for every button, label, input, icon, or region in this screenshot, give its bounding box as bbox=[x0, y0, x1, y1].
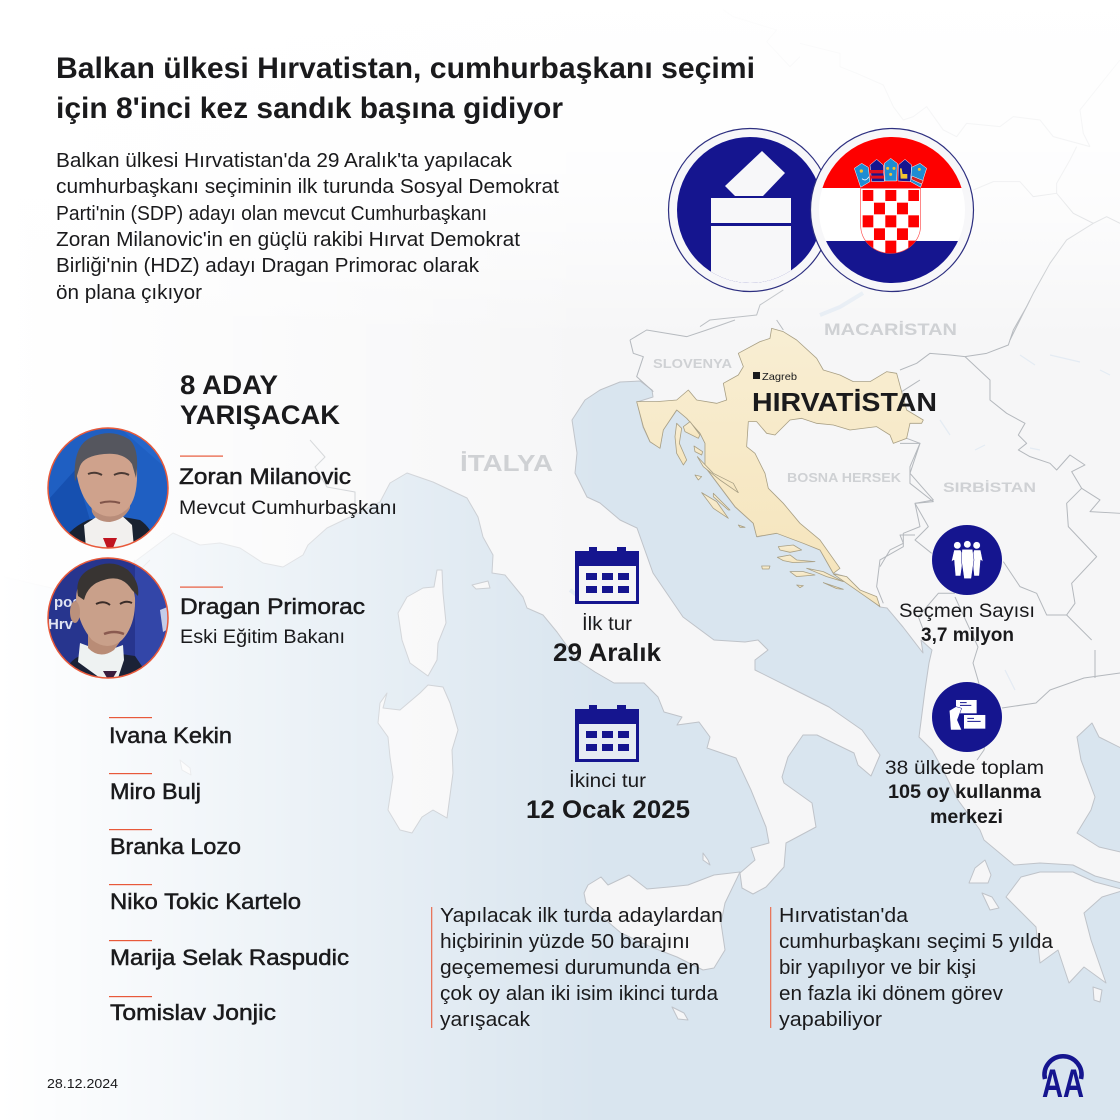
intro text bbox=[56, 150, 559, 304]
country label: Hırvatistan: HIRVATİSTAN bbox=[752, 389, 937, 417]
soft white fades bbox=[0, 0, 600, 1120]
intro text: Parti'nin (SDP) adayı olan mevcut Cumhurbaşkanı bbox=[56, 203, 487, 225]
candidate: Dragan Primorac bbox=[180, 586, 365, 648]
text block: second round rule: geçememesi durumunda en bbox=[440, 957, 700, 979]
icon: calendar first round bbox=[575, 547, 639, 604]
country label: Sırbistan: SIRBİSTAN bbox=[943, 479, 1036, 495]
intro text: cumhurbaşkanı seçiminin ilk turunda Sosyal Demokrat bbox=[56, 176, 559, 198]
intro text: ön plana çıkıyor bbox=[56, 282, 202, 304]
candidate: Branka Lozo: Branka Lozo bbox=[110, 834, 241, 859]
candidate: Marija Selak Raspudic: Marija Selak Raspudic bbox=[110, 945, 349, 970]
icon: ballot box bbox=[668, 128, 832, 292]
candidate: Zoran Milanovic: Mevcut Cumhurbaşkanı bbox=[179, 497, 397, 519]
text block: second round rule: yarışacak bbox=[440, 1009, 531, 1031]
heading: 8 candidates bbox=[180, 370, 340, 430]
first round date: 29 Aralık bbox=[553, 639, 661, 667]
candidate: Niko Tokic Kartelo: Niko Tokic Kartelo bbox=[110, 889, 301, 914]
intro text: Balkan ülkesi Hırvatistan'da 29 Aralık'ta yapılacak bbox=[56, 150, 513, 172]
intro text: Zoran Milanovic'in en güçlü rakibi Hırvat Demokrat bbox=[56, 229, 520, 251]
voter count: Seçmen Sayısı bbox=[899, 600, 1035, 622]
lakes and rivers bbox=[570, 293, 1110, 690]
country borders bbox=[120, 10, 1120, 760]
country label: Bosna Hersek: BOSNA HERSEK bbox=[787, 470, 902, 485]
polling stations count: 105 oy kullanma bbox=[888, 782, 1041, 803]
candidate: Miro Bulj: Miro Bulj bbox=[110, 779, 201, 804]
candidate: Dragan Primorac: Eski Eğitim Bakanı bbox=[180, 626, 345, 648]
islands bbox=[180, 570, 1120, 1020]
date: 28.12.2024 bbox=[47, 1077, 118, 1091]
text block: second round rule: çok oy alan iki isim ikinci turda bbox=[440, 983, 719, 1005]
logo: Anadolu Agency: AA bbox=[1042, 1062, 1084, 1106]
text block: term rule: Hırvatistan'da bbox=[779, 905, 909, 927]
portrait: Zoran Milanovic bbox=[48, 428, 168, 548]
title: Balkan ülkesi Hırvatistan, cumhurbaşkanı seçimi bbox=[56, 52, 755, 85]
coat of arms crown bbox=[854, 158, 927, 187]
second round date bbox=[526, 769, 690, 824]
candidate: Tomislav Jonjic: Tomislav Jonjic bbox=[110, 1000, 276, 1025]
heading: 8 candidates: 8 ADAY bbox=[180, 370, 278, 400]
polling stations count: 38 ülkede toplam bbox=[885, 757, 1044, 779]
first round date bbox=[553, 612, 661, 667]
land mass bbox=[0, 0, 1120, 894]
country label: Macaristan: MACARİSTAN bbox=[824, 320, 957, 339]
capital marker: Zagreb: Zagreb bbox=[762, 371, 797, 383]
candidate: Zoran Milanovic bbox=[179, 456, 397, 519]
voter count bbox=[899, 600, 1035, 646]
candidate: Ivana Kekin: Ivana Kekin bbox=[109, 723, 232, 748]
text block: term rule: bir yapılıyor ve bir kişi bbox=[779, 957, 976, 979]
icon: calendar second round bbox=[575, 705, 639, 762]
second round date: 12 Ocak 2025 bbox=[526, 796, 690, 824]
intro text: Birliği'nin (HDZ) adayı Dragan Primorac olarak bbox=[56, 255, 480, 277]
text block: term rule: yapabiliyor bbox=[779, 1009, 882, 1031]
candidate: Zoran Milanovic: Zoran Milanovic bbox=[179, 464, 351, 489]
text block: second round rule: hiçbirinin yüzde 50 barajını bbox=[440, 931, 690, 953]
text block: term rule bbox=[770, 905, 1054, 1031]
title: için 8'inci kez sandık başına gidiyor bbox=[56, 92, 563, 125]
title bbox=[56, 52, 755, 125]
portrait: Dragan Primorac: pos bbox=[54, 594, 81, 611]
candidate: Dragan Primorac: Dragan Primorac bbox=[180, 594, 365, 619]
icon: ballots in hand bbox=[932, 682, 1002, 752]
logo: Anadolu Agency bbox=[1042, 1056, 1084, 1106]
voter count: 3,7 milyon bbox=[921, 625, 1014, 646]
second round date: İkinci tur bbox=[569, 769, 647, 792]
country label: İtalya: İTALYA bbox=[460, 450, 553, 476]
text block: second round rule: Yapılacak ilk turda adaylardan bbox=[440, 905, 723, 927]
portrait: Dragan Primorac bbox=[48, 558, 170, 678]
polling stations count: merkezi bbox=[930, 807, 1003, 828]
country label: Slovenya: SLOVENYA bbox=[653, 357, 732, 371]
first round date: İlk tur bbox=[582, 612, 633, 635]
heading: 8 candidates: YARIŞACAK bbox=[180, 400, 340, 430]
map: Croatia highlighted bbox=[637, 328, 923, 607]
portrait: Dragan Primorac: Hrv bbox=[48, 616, 74, 633]
polling stations count bbox=[885, 757, 1044, 828]
text block: term rule: cumhurbaşkanı seçimi 5 yılda bbox=[779, 931, 1054, 953]
icon: voters bbox=[932, 525, 1002, 595]
text block: second round rule bbox=[431, 905, 723, 1031]
text block: term rule: en fazla iki dönem görev bbox=[779, 983, 1003, 1005]
icon: Croatian flag bbox=[810, 128, 974, 292]
